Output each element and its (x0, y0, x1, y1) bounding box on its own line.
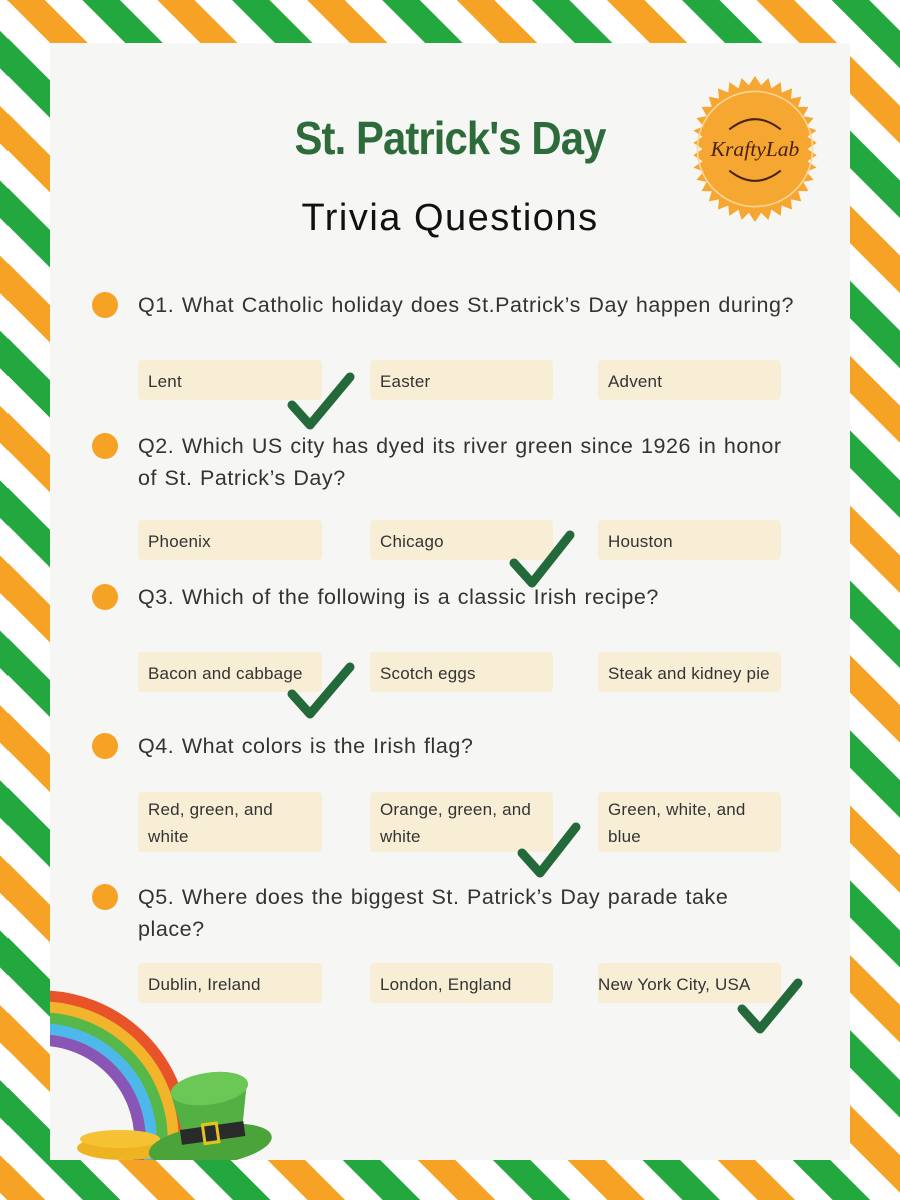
question 1: Q1. What Catholic holiday does St.Patrick’s Day happen during? (138, 293, 794, 317)
answers q2: Houston (608, 532, 673, 551)
question 3: Q3. Which of the following is a classic Irish recipe? (138, 585, 659, 609)
answers q1: Easter (380, 372, 430, 391)
answers q1: Lent (148, 372, 182, 391)
answers q2: Chicago (380, 532, 444, 551)
logo badge (693, 76, 817, 222)
question 5: Q5. Where does the biggest St. Patrick’s Day parade take place? (138, 885, 728, 941)
answers q3: Steak and kidney pie (608, 664, 770, 683)
answers q2: Phoenix (148, 532, 211, 551)
answers q2 (138, 520, 781, 560)
answers q4: Green, white, and blue (608, 800, 746, 846)
question 2: Q2. Which US city has dyed its river green since 1926 in honor of St. Patrick’s Day? (138, 434, 782, 490)
logo badge: KraftyLab (710, 137, 800, 161)
title: St. Patrick's Day (295, 112, 605, 164)
answers q3: Bacon and cabbage (148, 664, 303, 683)
answers q5: London, England (380, 975, 512, 994)
answers q5: New York City, USA (598, 975, 751, 994)
answers q5 (138, 963, 781, 1003)
illustration: rainbow, gold and hat (50, 990, 272, 1160)
subtitle: Trivia Questions (301, 197, 599, 239)
answers q3: Scotch eggs (380, 664, 476, 683)
answers q4: Orange, green, and white (380, 800, 531, 846)
answers q5: Dublin, Ireland (148, 975, 261, 994)
answers q4: Red, green, and white (148, 800, 273, 846)
question 4: Q4. What colors is the Irish flag? (138, 734, 473, 758)
answers q1: Advent (608, 372, 662, 391)
answers q1 (138, 360, 781, 400)
answers q4 (138, 792, 781, 852)
answers q3 (138, 652, 781, 692)
